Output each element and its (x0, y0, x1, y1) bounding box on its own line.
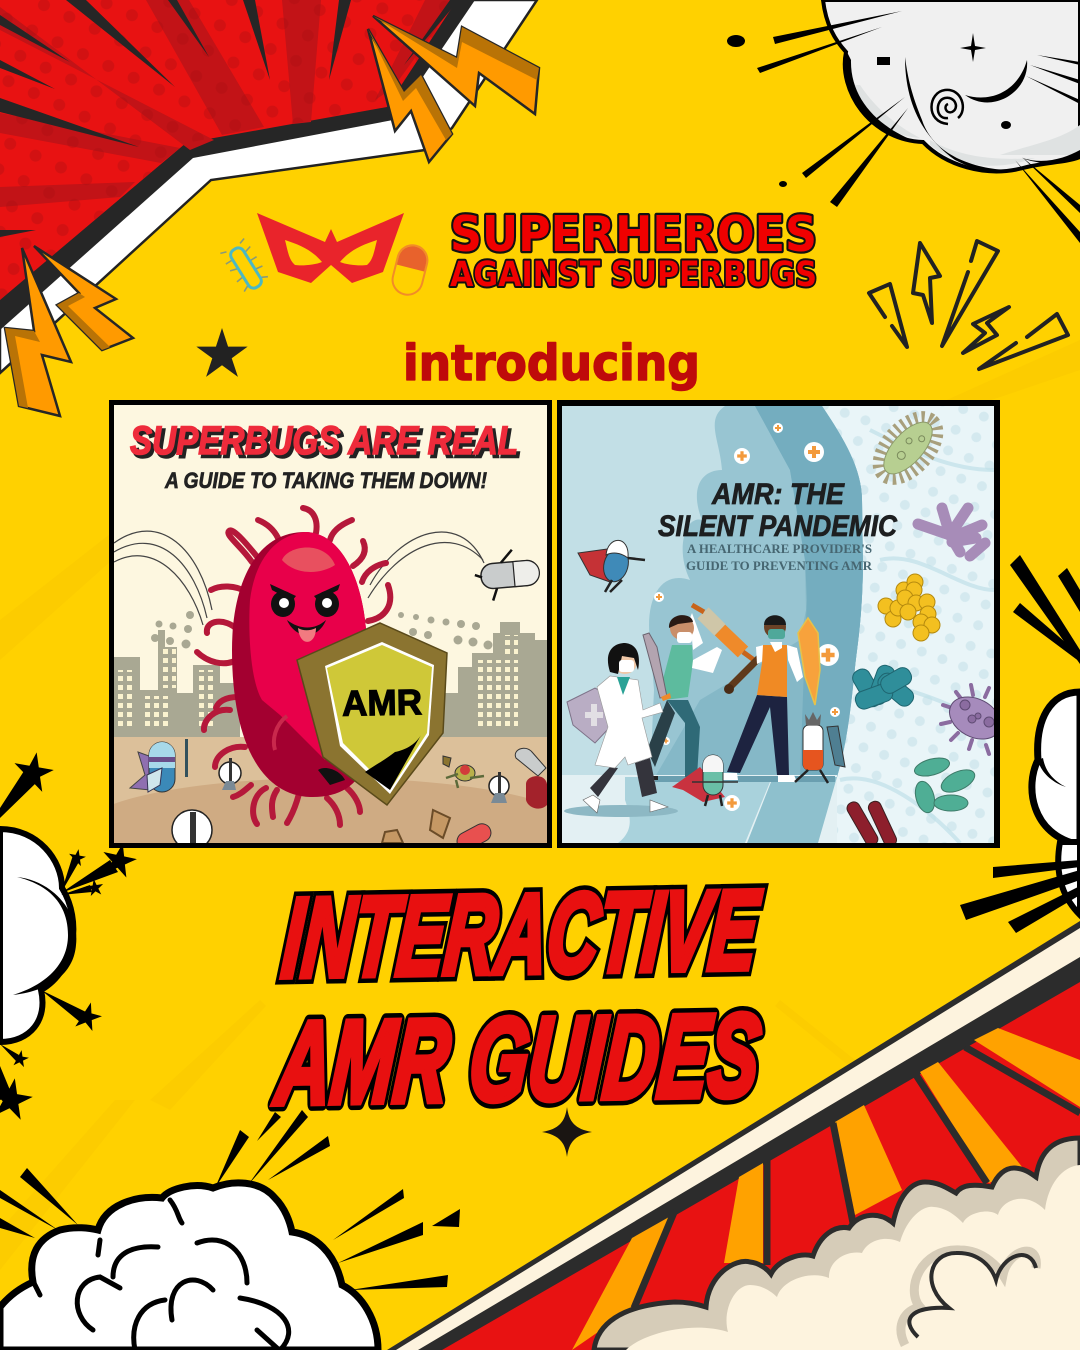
skyline (114, 611, 547, 737)
cloud: top right (823, 0, 1080, 173)
speed lines: bottom left cloud (0, 1110, 460, 1290)
icon: teal bacilli cluster (852, 664, 914, 710)
logo: Superheroes Against Superbugs (220, 206, 817, 298)
icon: four-point sparkle (542, 1107, 592, 1157)
icon: defeated capsule hero (473, 548, 541, 602)
icon: sparkle (960, 33, 986, 62)
cover title: SUPERBUGS ARE REAL (133, 422, 521, 466)
cover title: SUPERBUGS ARE REAL (130, 419, 518, 463)
icon: lightning bolts top (368, 16, 539, 162)
icon: doodle lightning group (869, 241, 1068, 369)
icon: lightning bolts left (5, 246, 133, 416)
cover subtitle: A GUIDE TO TAKING THEM DOWN! (164, 468, 487, 493)
icon: crescent (965, 60, 1027, 102)
cover subtitle: GUIDE TO PREVENTING AMR (686, 558, 873, 573)
icon: stars bursting from left cloud (0, 749, 139, 1121)
logo text line 1: SUPERHEROES (450, 206, 817, 263)
ground (114, 737, 547, 804)
cream starburst: bottom right (387, 921, 1080, 1350)
panel: Superbugs Are Real cover (109, 400, 552, 848)
cloud: bottom left (0, 1183, 378, 1350)
germ illustrations (846, 411, 994, 843)
icon: green bacterium (872, 411, 944, 485)
blue wave background (562, 406, 863, 843)
main title: Interactive AMR Guides: INTERACTIVE (278, 867, 765, 1002)
main title: Interactive AMR Guides: AMR GUIDES (270, 990, 765, 1130)
icon: purple coral germ (918, 508, 985, 556)
icon: bacterium (220, 238, 270, 295)
icon: green bean bacteria (914, 758, 976, 814)
main title: Interactive AMR Guides: AMR GUIDES (270, 990, 765, 1130)
speed lines: top right cloud (727, 11, 1080, 243)
icon: black star (196, 328, 248, 377)
orange rays (572, 1028, 1080, 1350)
main title: Interactive AMR Guides (270, 867, 765, 1130)
main title: Interactive AMR Guides: INTERACTIVE (278, 867, 765, 1002)
cloud: bottom right (594, 1138, 1080, 1350)
icon: fallen characters (172, 748, 547, 853)
cloud: right edge (1032, 692, 1080, 915)
heading: introducing: introducing (403, 335, 700, 392)
icon: yellow cocci cluster (878, 574, 940, 641)
icon: dark red bacilli (846, 800, 897, 843)
icon: caped capsule hero (130, 739, 188, 792)
icon: purple spiked germ (939, 683, 994, 756)
background rays (0, 340, 1080, 1270)
cover title: SILENT PANDEMIC (658, 510, 898, 543)
speed lines: right edge (960, 555, 1080, 933)
cover title: AMR: THE (711, 478, 845, 511)
panel: AMR The Silent Pandemic cover (557, 400, 1008, 848)
icon: AMR shield (297, 623, 447, 805)
icon: spiral (932, 90, 963, 124)
cover title (658, 483, 898, 537)
comic burst: top-left (0, 0, 537, 373)
small capsule heroes (672, 712, 845, 806)
logo text line 2: AGAINST SUPERBUGS (450, 255, 817, 295)
cover subtitle (686, 544, 872, 570)
cover subtitle: A HEALTHCARE PROVIDER'S (687, 541, 872, 556)
cloud: left edge (0, 829, 76, 1042)
icon: capsule (389, 242, 431, 298)
doctor with shield and sword (567, 633, 671, 813)
plus icons (654, 423, 840, 811)
man with syringe (642, 605, 754, 780)
shield label: AMR (342, 681, 422, 724)
man with orange vest and shield (720, 615, 820, 782)
motion arcs (114, 531, 484, 625)
icon: red mask (257, 213, 404, 283)
flying capsule hero (578, 540, 645, 592)
icon: red superbug (197, 508, 390, 825)
cover title (130, 425, 520, 488)
